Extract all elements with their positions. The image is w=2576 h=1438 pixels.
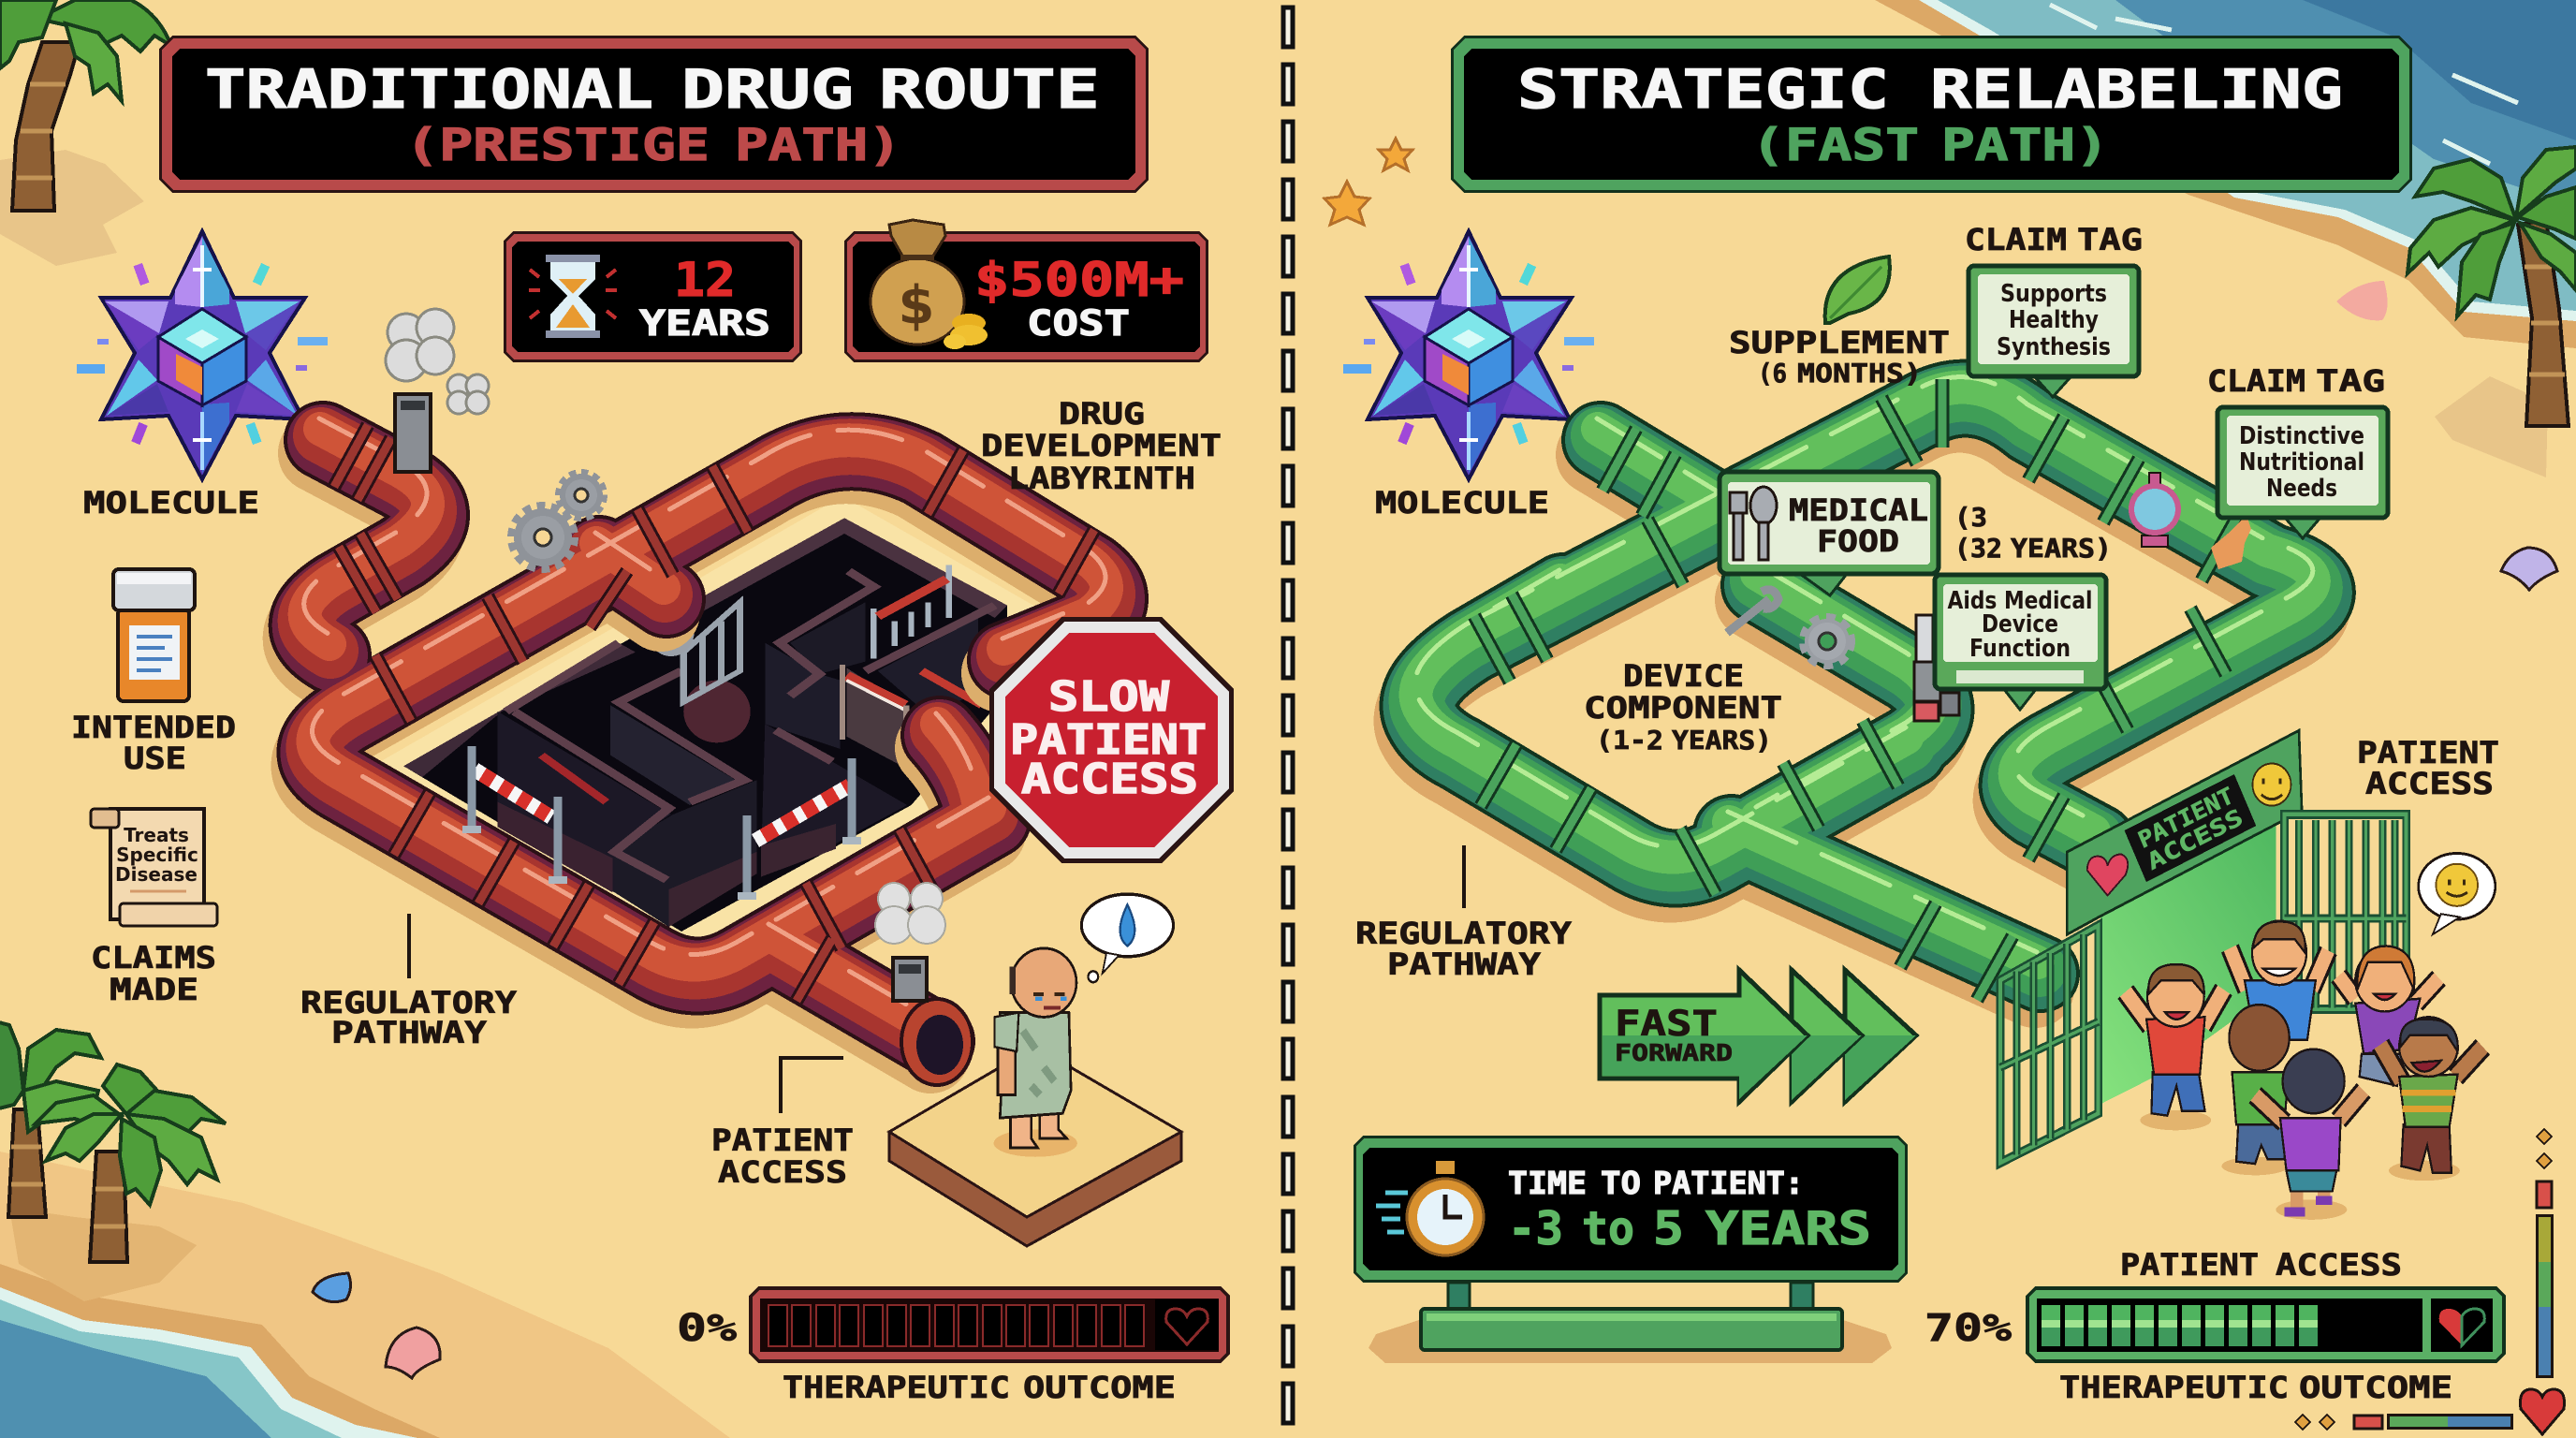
label: therapeutic outcome, left: THERAPEUTIC bbox=[783, 1370, 1010, 1405]
icon: half heart bbox=[2439, 1309, 2484, 1345]
icon: device valve bbox=[1914, 615, 1959, 721]
icon: leaf bbox=[1825, 257, 1890, 323]
barriers around pit bbox=[462, 746, 861, 896]
icon: heart on banner bbox=[2087, 854, 2128, 896]
icon: money bag with coins: $ bbox=[899, 275, 934, 336]
person: red shirt bbox=[2126, 964, 2224, 1130]
callout: medical food: FOOD bbox=[1817, 523, 1899, 559]
label: 70 percent: 70% bbox=[1925, 1307, 2012, 1350]
arrow: fast forward: FAST bbox=[1615, 1004, 1718, 1044]
label: patient access with bracket, left: PATIENT bbox=[711, 1123, 854, 1158]
callout: claim tag distinctive nutritional needs: TAG bbox=[2316, 363, 2385, 399]
banner bbox=[2067, 730, 2302, 934]
callout: aids medical device function: Aids Medical bbox=[1947, 587, 2093, 615]
label: therapeutic outcome, right: THERAPEUTIC bbox=[2059, 1370, 2289, 1405]
label: supplement 6 months: (6 bbox=[1758, 358, 1787, 389]
right title panel: RELABELING bbox=[1930, 59, 2343, 121]
callout: claim tag distinctive nutritional needs: Needs bbox=[2266, 475, 2337, 503]
icon: scroll with claim text: Disease bbox=[115, 863, 198, 886]
callout: claim tag supports healthy synthesis: TAG bbox=[2077, 222, 2143, 257]
label: intended use: INTENDED bbox=[71, 710, 236, 745]
label: claims made: MADE bbox=[110, 972, 198, 1007]
label: therapeutic outcome, left: OUTCOME bbox=[1023, 1370, 1176, 1405]
callout: claim tag supports healthy synthesis: Synthesis bbox=[1997, 333, 2111, 361]
center gate bbox=[683, 602, 740, 702]
stat box: cost: $500M+ bbox=[974, 253, 1184, 307]
label: drug development labyrinth: DRUG bbox=[1059, 396, 1145, 432]
right gate bbox=[873, 565, 949, 658]
person: purple top, orange hair bbox=[2338, 946, 2439, 1086]
right title panel: (FAST bbox=[1751, 120, 1919, 171]
left gate door bbox=[2000, 925, 2099, 1163]
label: drug development labyrinth: DEVELOPMENT bbox=[981, 428, 1222, 463]
label: patient access with bracket, left: ACCESS bbox=[718, 1154, 847, 1190]
filled cells bbox=[2042, 1315, 2319, 1337]
corner HUD: vertical and horizontal meters with heart bbox=[2295, 1129, 2565, 1434]
label: 3 / 32 years: (3 bbox=[1954, 502, 1987, 533]
panel: time to patient: TO bbox=[1601, 1165, 1641, 1201]
label: device component bbox=[1584, 658, 1782, 756]
right title panel: PATH) bbox=[1941, 120, 2109, 171]
icon: hourglass bbox=[529, 255, 617, 338]
label: intended use bbox=[71, 710, 236, 776]
pipe outlet opening bbox=[901, 999, 973, 1085]
icon: money bag with coins bbox=[871, 220, 988, 349]
green light floor bbox=[2100, 820, 2276, 1104]
icon: vent with smoke, top bbox=[386, 309, 489, 472]
stat box: 12 years: YEARS bbox=[639, 303, 770, 344]
beach and ocean, top right bbox=[1875, 0, 2576, 348]
callout: claim tag distinctive nutritional needs bbox=[2207, 363, 2388, 538]
label: regulatory pathway, right: PATHWAY bbox=[1387, 946, 1542, 982]
beach and ocean, bottom left bbox=[0, 1152, 730, 1438]
icon: scroll with claim text bbox=[91, 809, 217, 926]
label: patient access above bar bbox=[2120, 1247, 2402, 1283]
arrow: fast forward: FORWARD bbox=[1615, 1039, 1733, 1066]
person: purple shirt, dark hair bbox=[2255, 1049, 2364, 1220]
label: patient access with bracket, left bbox=[711, 1058, 854, 1190]
label: therapeutic outcome, right bbox=[2059, 1370, 2452, 1405]
person: green shirt seen from behind bbox=[2221, 1005, 2290, 1175]
panel: time to patient: -3 bbox=[1508, 1202, 1563, 1255]
icon: gear on green pipe bbox=[1805, 619, 1850, 664]
stop sign: slow patient access: SLOW bbox=[1048, 673, 1170, 721]
label: drug development labyrinth bbox=[981, 396, 1222, 496]
label: regulatory pathway, right: REGULATORY bbox=[1355, 916, 1573, 951]
label: therapeutic outcome, left bbox=[783, 1370, 1176, 1405]
sad patient character bbox=[994, 894, 1174, 1157]
label: device component: (1-2 bbox=[1596, 725, 1663, 756]
callout: medical food: MEDICAL bbox=[1789, 492, 1928, 528]
callout: claim tag supports healthy synthesis: Supports bbox=[2000, 280, 2107, 308]
progress bar: therapeutic outcome 0% bbox=[749, 1286, 1230, 1363]
label: regulatory pathway, right bbox=[1355, 845, 1573, 982]
callout: claim tag supports healthy synthesis bbox=[1965, 222, 2143, 397]
callout: aids medical device function bbox=[1935, 575, 2106, 710]
icon: pressure gauge on pipe bbox=[2131, 473, 2178, 547]
panel: time to patient: to bbox=[1582, 1202, 1634, 1255]
label: device component: DEVICE bbox=[1623, 658, 1744, 694]
sand ledge around labyrinth bbox=[370, 496, 1039, 964]
label: claims made bbox=[91, 940, 216, 1007]
label: patient access, right: ACCESS bbox=[2365, 766, 2494, 801]
label: 3 / 32 years: (32 bbox=[1954, 533, 2002, 564]
callout: claim tag distinctive nutritional needs: CLAIM bbox=[2207, 363, 2305, 399]
callout: claim tag supports healthy synthesis: Healthy bbox=[2009, 306, 2099, 334]
gate: patient access gateway bbox=[2000, 730, 2496, 1220]
stat box: cost: COST bbox=[1027, 303, 1130, 344]
sign stand bbox=[1368, 1283, 1892, 1363]
icon: molecule crystal, right bbox=[1343, 231, 1594, 479]
label: intended use: USE bbox=[124, 741, 186, 776]
icon: molecule crystal, left bbox=[77, 231, 328, 479]
small door with red barrier bbox=[541, 665, 982, 802]
left title panel: ROUTE bbox=[879, 59, 1100, 121]
icon: empty heart bbox=[1166, 1309, 1208, 1344]
palm tree top right bbox=[2408, 147, 2576, 477]
label: 0 percent: 0% bbox=[677, 1307, 737, 1350]
label: regulatory pathway, left bbox=[300, 914, 518, 1050]
label: molecule, right: MOLECULE bbox=[1375, 485, 1549, 521]
label: patient access above bar: PATIENT bbox=[2120, 1247, 2259, 1283]
icon: fork and spoon bbox=[1730, 487, 1777, 560]
label: 3 / 32 years bbox=[1954, 502, 2112, 564]
stat box: 12 years: 12 bbox=[674, 253, 736, 307]
icon: scroll with claim text: Specific bbox=[116, 844, 198, 866]
pipe: green fast pathway bbox=[1413, 377, 2317, 1000]
smiley speech bubble bbox=[2419, 854, 2496, 934]
stop sign: slow patient access: PATIENT bbox=[1010, 716, 1207, 764]
drug development labyrinth bbox=[403, 518, 1007, 932]
stat box: cost bbox=[844, 220, 1208, 362]
label: patient access, right bbox=[2357, 735, 2499, 801]
stop sign: slow patient access bbox=[989, 617, 1234, 863]
label: supplement 6 months bbox=[1729, 325, 1950, 389]
speech bubble with tear drop bbox=[1081, 894, 1174, 982]
banner sign text: ACCESS bbox=[2144, 803, 2247, 875]
panel: time to patient: YEARS bbox=[1705, 1202, 1871, 1255]
stars bbox=[1325, 139, 1412, 225]
label: patient access above bar: ACCESS bbox=[2276, 1247, 2402, 1283]
icon: pointing hand bbox=[2211, 515, 2251, 569]
label: supplement 6 months: SUPPLEMENT bbox=[1729, 325, 1950, 360]
banner sign text bbox=[2125, 774, 2256, 882]
callout: claim tag supports healthy synthesis: CLAIM bbox=[1965, 222, 2067, 257]
label: patient access, right: PATIENT bbox=[2357, 735, 2499, 770]
left title panel: TRADITIONAL bbox=[205, 59, 653, 121]
panel: time to patient: 5 bbox=[1653, 1202, 1684, 1255]
callout: aids medical device function: Function bbox=[1969, 635, 2071, 663]
label: supplement 6 months: MONTHS) bbox=[1797, 358, 1922, 389]
left title panel: DRUG bbox=[681, 59, 854, 121]
icon: wrench bbox=[1727, 590, 1778, 633]
divider dashed line bbox=[1283, 7, 1293, 1423]
icon: stopwatch bbox=[1376, 1161, 1484, 1255]
panel: time to patient bbox=[1354, 1136, 1908, 1363]
left title panel bbox=[159, 36, 1149, 193]
label: device component: YEARS) bbox=[1672, 725, 1772, 756]
label: device component: COMPONENT bbox=[1584, 690, 1782, 726]
stat box: 12 years bbox=[504, 231, 802, 362]
palm tree top left bbox=[0, 0, 171, 266]
person: striped shirt bbox=[2380, 1017, 2482, 1181]
label: regulatory pathway, left: REGULATORY bbox=[300, 985, 518, 1020]
icons: broken gears on pipe bbox=[514, 474, 603, 566]
right title panel: STRATEGIC bbox=[1517, 59, 1889, 121]
icon: vent with smoke, lower bbox=[875, 883, 945, 1001]
label: claims made: CLAIMS bbox=[91, 940, 216, 976]
icon: pill bottle bbox=[113, 569, 195, 701]
panel: time to patient: TIME bbox=[1508, 1165, 1587, 1201]
callout: claim tag distinctive nutritional needs: Nutritional bbox=[2239, 448, 2364, 477]
icon: smiley on banner bbox=[2252, 764, 2291, 806]
progress bar: therapeutic outcome 70% bbox=[2026, 1286, 2506, 1363]
palm trees bottom left bbox=[0, 1021, 226, 1301]
person: blue shirt bbox=[2230, 921, 2328, 1040]
banner sign text: PATIENT bbox=[2134, 782, 2237, 854]
callout: aids medical device function: Device bbox=[1982, 610, 2058, 638]
label: regulatory pathway, left: PATHWAY bbox=[331, 1015, 488, 1050]
panel: time to patient: PATIENT: bbox=[1653, 1165, 1804, 1201]
label: molecule, left: MOLECULE bbox=[83, 485, 259, 521]
left title panel: (PRESTIGE bbox=[405, 120, 710, 171]
left title panel: PATH) bbox=[735, 120, 901, 171]
seashells bbox=[313, 281, 2557, 1378]
arrow: fast forward bbox=[1600, 970, 1916, 1102]
pipe: red regulatory pathway bbox=[302, 418, 1109, 1085]
callout: medical food bbox=[1720, 472, 1939, 595]
right title panel bbox=[1451, 36, 2412, 193]
right gate door bbox=[2284, 814, 2407, 1009]
icon: scroll with claim text: Treats bbox=[124, 824, 189, 846]
callout: claim tag distinctive nutritional needs: Distinctive bbox=[2239, 422, 2364, 450]
label: 3 / 32 years: YEARS) bbox=[2011, 533, 2112, 564]
gear on labyrinth bbox=[652, 608, 690, 653]
label: drug development labyrinth: LABYRINTH bbox=[1008, 461, 1195, 496]
label: therapeutic outcome, right: OUTCOME bbox=[2299, 1370, 2452, 1405]
sand platform bbox=[889, 1047, 1181, 1246]
stop sign: slow patient access: ACCESS bbox=[1021, 756, 1198, 803]
